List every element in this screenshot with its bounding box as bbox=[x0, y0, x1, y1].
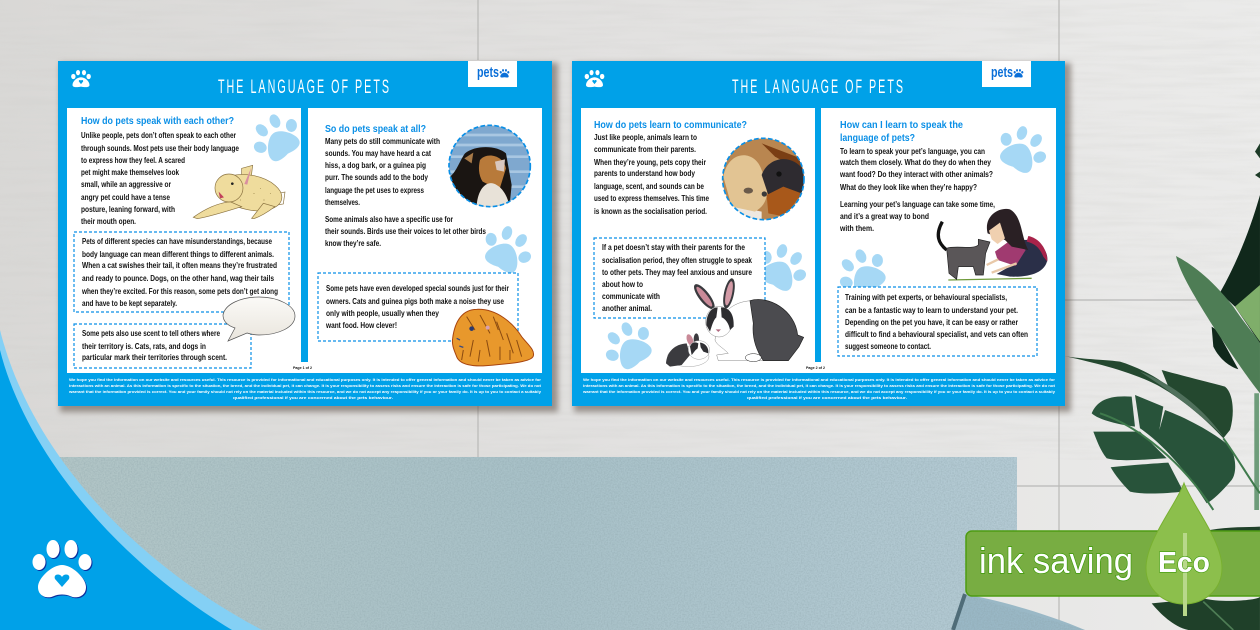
text block: how can I learn: with them. bbox=[839, 224, 874, 233]
callout box: socialisation: about how to bbox=[602, 280, 643, 289]
plant: long leaf highlight bbox=[1140, 372, 1223, 437]
rabbit dark rear bbox=[750, 299, 804, 361]
text block: how do pets speak bbox=[81, 131, 239, 226]
text block: how can I learn: watch them closely. What do they do when they bbox=[839, 158, 991, 167]
text block: how do pets speak: angry pet could have a tense bbox=[81, 193, 170, 202]
disclaimer footer: We hope you find the information on our website and resources useful. This resource is provided for informational and educational purposes only. It is intended to offer general information and should never be taken as advice for bbox=[69, 377, 541, 382]
text block: how do pets speak: to express how they feel. A scared bbox=[81, 156, 185, 165]
callout box: socialisation: to other pets. They may feel anxious and unsure bbox=[602, 268, 752, 277]
poster 1 title: THE LANGUAGE OF PETS bbox=[218, 77, 389, 98]
callout box: socialisation: another animal. bbox=[602, 304, 652, 313]
text block: so do pets speak: Some animals also have a specific use for bbox=[325, 215, 453, 224]
eco label: Eco bbox=[1158, 547, 1210, 579]
text block: so do pets speak: know they’re safe. bbox=[325, 239, 381, 248]
paw decoration bbox=[594, 312, 663, 378]
callout box: misunderstandings: When a cat swishes their tail, it often means they’re frustrated bbox=[82, 261, 277, 270]
page number: Page 2 of 2 bbox=[806, 366, 825, 370]
heading: how can I learn: language of pets? bbox=[840, 133, 915, 144]
photo: dog in circle bbox=[447, 125, 533, 208]
plant: banana leaf lobes bbox=[1092, 395, 1235, 503]
callout box: special sounds: want food. How clever! bbox=[325, 321, 397, 330]
text block: how do pets learn: used to express themselves. This time bbox=[594, 194, 709, 203]
text block: how can I learn: Learning your pet’s language can take some time, bbox=[840, 200, 995, 209]
text block: how do pets speak: posture, leaning forward, with bbox=[81, 205, 175, 214]
paw decoration bbox=[989, 117, 1057, 180]
rabbit head bbox=[706, 306, 732, 337]
text block: how do pets learn: parents to understand how body bbox=[594, 169, 695, 178]
callout box: special sounds: Some pets have even developed special sounds just for their bbox=[326, 284, 509, 293]
text block: how do pets learn bbox=[594, 133, 709, 216]
disclaimer footer: qualified professional if you are concerned about the pets behaviour. bbox=[233, 395, 393, 400]
text block: how can I learn: want food? Do they interact with other animals? bbox=[839, 170, 993, 179]
poster 2 bbox=[572, 61, 1065, 406]
text block: so do pets speak: hiss, a dog bark, or a guinea pig bbox=[325, 161, 426, 170]
text block: so do pets speak: Many pets do still communicate with bbox=[325, 137, 440, 146]
callout box: special sounds: owners. Cats and guinea pigs both make a noise they use bbox=[326, 297, 504, 306]
poster 1 white panels bbox=[67, 108, 542, 373]
callout box: training: can be a fantastic way to learn to understand your pet. bbox=[845, 306, 1018, 315]
heading: how do pets speak: How do pets speak with each other? bbox=[81, 116, 234, 127]
text block: how do pets learn: language, scent, and sounds can be bbox=[594, 182, 704, 191]
plant bbox=[1064, 143, 1260, 510]
callout box: special sounds: only with people, usually when they bbox=[326, 309, 439, 318]
text block: so do pets speak: purr. The sounds add to the body bbox=[325, 173, 428, 182]
callout box: misunderstandings: when they’re excited. For this reason, some pets don’t get along bbox=[81, 287, 278, 296]
poster 1 pets logo bbox=[468, 61, 517, 87]
callout box: misunderstandings: body language can mean different things to different animals. bbox=[82, 250, 274, 259]
poster 1 bbox=[58, 61, 552, 406]
callout box: training: difficult to find a behavioural specialist, and vets can often bbox=[845, 330, 1028, 339]
plant: vertical stem bbox=[1250, 393, 1260, 510]
text block: how do pets learn: When they’re young, pets copy their bbox=[594, 158, 706, 167]
icon: paw with heart bbox=[32, 540, 92, 598]
text block: so do pets speak: their sounds. Birds use their voices to let other birds bbox=[325, 227, 486, 236]
icon: leaf drop bbox=[1146, 483, 1222, 604]
text block: so do pets speak: themselves. bbox=[325, 198, 360, 207]
heading: how can I learn: How can I learn to speak the bbox=[840, 120, 963, 131]
rabbit ears bbox=[691, 281, 718, 312]
speech bubble bbox=[223, 297, 295, 341]
callout box: training bbox=[838, 287, 1037, 356]
plant: bright leaf bbox=[1235, 285, 1260, 342]
heading: how do pets learn: How do pets learn to communicate? bbox=[594, 120, 747, 131]
disclaimer footer: We hope you find the information on our website and resources useful. This resource is provided for informational and educational purposes only. It is intended to offer general information and should never be taken as advice for bbox=[583, 377, 1055, 382]
illustration: cream rabbit bbox=[193, 165, 285, 219]
callout box: socialisation: socialisation period, they often struggle to speak bbox=[602, 256, 752, 265]
text block: how do pets learn: is known as the socialisation period. bbox=[594, 207, 707, 216]
sofa bbox=[0, 457, 1090, 630]
heading: so do pets speak: So do pets speak at all? bbox=[325, 124, 426, 135]
text block: how can I learn: To learn to speak your pet’s language, you can bbox=[840, 147, 985, 156]
text block: how do pets speak: through sounds. Most pets use their body language bbox=[81, 144, 239, 153]
illustration: small rabbit bbox=[666, 333, 710, 367]
blue corner swoosh bbox=[0, 330, 262, 630]
callout box: misunderstandings bbox=[74, 232, 289, 312]
callout box: misunderstandings: Pets of different species can have misunderstandings, because bbox=[82, 237, 272, 246]
plant: long leaf bbox=[1064, 356, 1233, 438]
text block: how do pets speak: pet might make themselves look bbox=[81, 168, 179, 177]
poster 2 white panels bbox=[581, 108, 1056, 373]
text block: how can I learn: and it’s a great way to bond bbox=[840, 212, 929, 221]
text block: how do pets learn: communicate from their parents. bbox=[594, 145, 696, 154]
text block: how can I learn: What do they look like when they’re happy? bbox=[840, 183, 977, 192]
photo: puppies in circle bbox=[722, 138, 805, 220]
text block: how do pets speak: small, while an aggressive or bbox=[81, 180, 171, 189]
text block: so do pets speak: language the pet uses to express bbox=[325, 186, 424, 195]
disclaimer footer: warrant that the information provided is correct. You and your family should not rely on the material included within this resource, and we do not accept any responsibility if you or your family do. It is up to you to contact a suitably bbox=[68, 389, 542, 394]
text block: how do pets learn: Just like people, animals learn to bbox=[594, 133, 697, 142]
callout box: scent: particular mark their territories through scent. bbox=[82, 353, 227, 362]
leaf vein bbox=[1183, 533, 1187, 616]
callout box: socialisation bbox=[594, 238, 765, 318]
poster 2 pets logo bbox=[982, 61, 1031, 87]
disclaimer footer: warrant that the information provided is correct. You and your family should not rely on the material included within this resource, and we do not accept any responsibility if you or your family do. It is up to you to contact a suitably bbox=[582, 389, 1056, 394]
text block: so do pets speak: sounds. You may have heard a cat bbox=[325, 149, 431, 158]
illustration: girl and cat bbox=[938, 209, 1047, 280]
poster 2 shadow bbox=[574, 63, 1071, 412]
callout box: misunderstandings: and ready to pounce. Dogs, on the other hand, wag their tails bbox=[82, 274, 274, 283]
disclaimer footer: qualified professional if you are concerned about the pets behaviour. bbox=[747, 395, 907, 400]
callout box: misunderstandings: and have to be kept separately. bbox=[82, 299, 177, 308]
plant: top dark leaf tip bbox=[1255, 143, 1260, 178]
illustration: big rabbit bbox=[691, 277, 804, 362]
disclaimer footer: interactions with an animal. As this information is specific to the situation, the breed, and the individual pet, it can change. It is your responsibility to assess risks and ensure the interaction is safe for those participating. We do not bbox=[583, 383, 1056, 388]
callout box: socialisation: communicate with bbox=[602, 292, 660, 301]
plant: leaves behind badge bbox=[1152, 527, 1260, 630]
text block: how can I learn bbox=[839, 147, 995, 233]
text block: how do pets speak: Unlike people, pets don’t often speak to each other bbox=[81, 131, 236, 140]
callout box: special sounds bbox=[318, 273, 518, 341]
poster 2 paw logo bbox=[585, 70, 604, 87]
disclaimer footer bbox=[582, 377, 1056, 400]
callout box: scent bbox=[74, 324, 251, 368]
poster 2 title: THE LANGUAGE OF PETS bbox=[732, 77, 903, 98]
poster 2 pets logo: pets bbox=[991, 64, 1013, 81]
illustration: guinea pig bbox=[452, 309, 534, 366]
plant: mid green leaf bbox=[1176, 256, 1260, 393]
heading: how can I learn bbox=[840, 120, 963, 144]
callout box: training: Training with pet experts, or behavioural specialists, bbox=[845, 293, 1007, 302]
plant: dark back leaf bbox=[1212, 195, 1260, 369]
disclaimer footer: interactions with an animal. As this information is specific to the situation, the breed, and the individual pet, it can change. It is your responsibility to assess risks and ensure the interaction is safe for those participating. We do not bbox=[69, 383, 542, 388]
paw decoration bbox=[474, 217, 542, 280]
disclaimer footer bbox=[68, 377, 542, 400]
paw decoration bbox=[828, 239, 897, 305]
rabbit feet bbox=[745, 354, 761, 362]
paw decoration bbox=[749, 235, 817, 298]
callout box: scent: their territory is. Cats, rats, and dogs in bbox=[82, 342, 206, 351]
callout box: training: Depending on the pet you have, it can be easy or rather bbox=[845, 318, 1018, 327]
plant: midrib and stems bbox=[1100, 413, 1260, 510]
page number: Page 1 of 2 bbox=[293, 366, 312, 370]
text block: so do pets speak bbox=[325, 137, 486, 248]
ink saving eco badge bbox=[966, 483, 1260, 616]
poster 1 shadow bbox=[60, 63, 558, 412]
text block: how do pets speak: their mouth open. bbox=[81, 217, 136, 226]
ink saving label: ink saving bbox=[979, 540, 1133, 581]
callout box: scent: Some pets also use scent to tell others where bbox=[82, 329, 220, 338]
rabbit white body bbox=[715, 301, 772, 361]
callout box: training: suggest someone to contact. bbox=[845, 342, 931, 351]
poster 1 paw logo bbox=[71, 70, 91, 87]
poster 1 pets logo: pets bbox=[477, 64, 499, 81]
badge bar bbox=[966, 531, 1260, 596]
paw decoration bbox=[242, 104, 311, 170]
callout box: socialisation: If a pet doesn’t stay with their parents for the bbox=[602, 243, 745, 252]
